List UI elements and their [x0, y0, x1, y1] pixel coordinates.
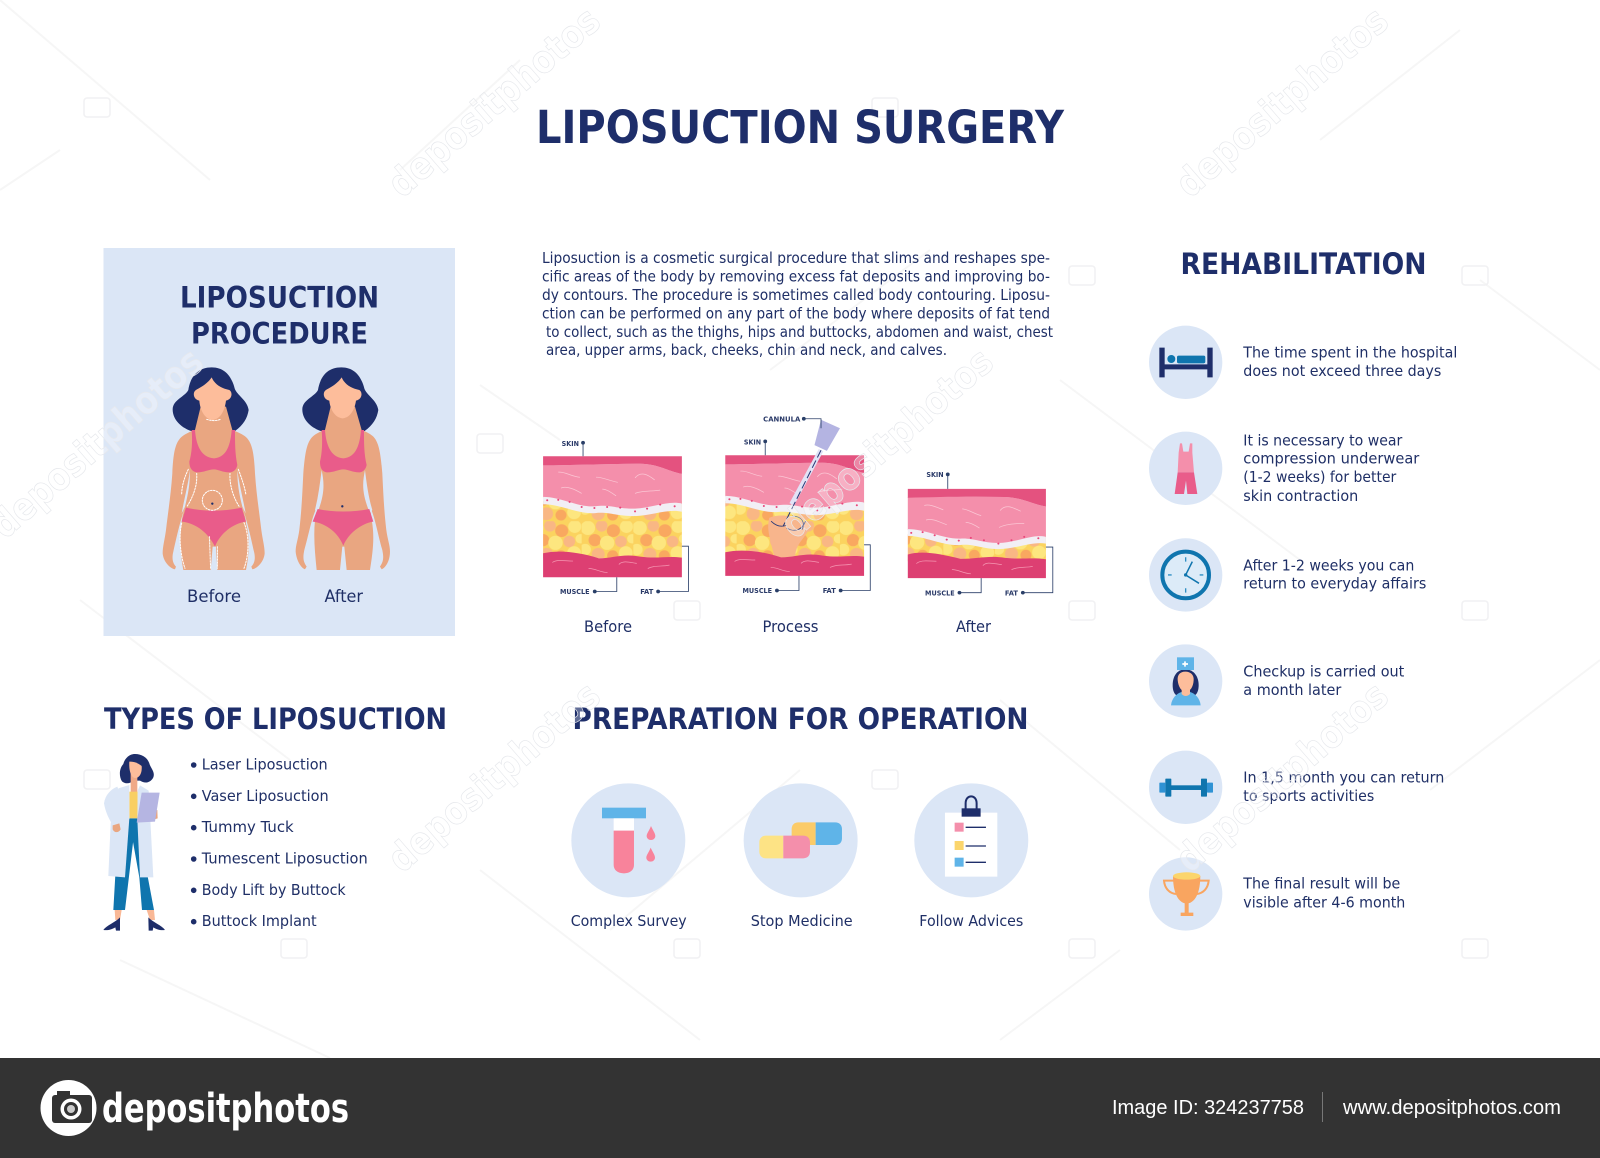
icon: pills: [744, 783, 858, 897]
rehab text: underwear: skin contraction: [1243, 487, 1358, 505]
caption: process stage: Process: [762, 617, 818, 636]
rehab text: final result: The final result will be: [1242, 875, 1400, 893]
rehab text: underwear: [1243, 431, 1420, 505]
panel: preparation for operation: [571, 702, 1028, 930]
skin diagram: after: FAT: [1005, 588, 1019, 597]
watermark text overlay: depositphotos: [772, 339, 1002, 547]
caption: follow advices: Follow Advices: [919, 912, 1023, 930]
rehab text: hospital: does not exceed three days: [1243, 362, 1441, 380]
image id: Image ID: 324237758: [1112, 1097, 1304, 1119]
website url: www.depositphotos.com: [1342, 1097, 1561, 1119]
intro paragraph: Liposuction is a cosmetic surgical procedure that slims and reshapes spe-: [542, 249, 1050, 267]
intro paragraph: ction can be performed on any part of the body where deposits of fat tend: [542, 304, 1050, 322]
skin diagram: process: [725, 415, 870, 595]
intro paragraph: to collect, such as the thighs, hips and buttocks, abdomen and waist, chest: [546, 323, 1053, 341]
rehab text: hospital: The time spent in the hospital: [1242, 344, 1457, 362]
list: liposuction types: Laser Liposuction: [202, 756, 328, 774]
caption: before stage: Before: [584, 617, 632, 636]
icon: dumbbell: [1149, 751, 1222, 824]
rehab text: checkup: Checkup is carried out: [1243, 662, 1404, 680]
watermark text overlay: depositphotos: [1167, 673, 1397, 881]
rehab text: underwear: (1-2 weeks) for better: [1243, 468, 1397, 486]
icon: clipboard: [914, 783, 1028, 897]
skin diagram: after: MUSCLE: [925, 588, 955, 597]
skin diagram: process: FAT: [823, 586, 837, 595]
list: liposuction types: [191, 756, 368, 930]
intro paragraph: area, upper arms, back, cheeks, chin and neck, and calves.: [546, 341, 947, 359]
panel heading: PROCEDURE: [191, 316, 368, 350]
icon: test tube: [571, 783, 685, 897]
rehab text: final result: visible after 4-6 month: [1243, 893, 1405, 911]
list: liposuction types: Tummy Tuck: [201, 818, 294, 836]
title: LIPOSUCTION SURGERY: [536, 101, 1065, 154]
list: liposuction types: Body Lift by Buttock: [202, 881, 346, 899]
rehab text: everyday affairs: [1243, 556, 1426, 593]
skin diagram: before: FAT: [640, 587, 654, 596]
icon: cannula: [771, 420, 840, 530]
icon: compression underwear: [1149, 432, 1222, 505]
caption: before: Before: [187, 587, 241, 606]
footer bar: [0, 1058, 1600, 1158]
rehab text: checkup: a month later: [1243, 681, 1342, 699]
logo wordmark: depositphotos: [102, 1086, 349, 1132]
list: liposuction types: Vaser Liposuction: [202, 787, 329, 805]
rehabilitation heading: REHABILITATION: [1180, 247, 1426, 281]
figure: body after: [296, 367, 390, 570]
skin diagram: after: SKIN: [926, 470, 944, 479]
list: liposuction types: Buttock Implant: [202, 912, 317, 930]
watermark text overlay: [0, 0, 1397, 881]
panel heading: LIPOSUCTION: [180, 280, 379, 314]
types heading: TYPES OF LIPOSUCTION: [104, 702, 447, 736]
skin diagram: after: [908, 470, 1053, 597]
rehab text: sports: [1243, 769, 1444, 805]
preparation heading: PREPARATION FOR OPERATION: [572, 702, 1028, 736]
logo icon: [40, 1080, 96, 1136]
intro paragraph: dy contours. The procedure is sometimes called body contouring. Liposu-: [542, 286, 1050, 304]
rehab text: underwear: compression underwear: [1243, 450, 1420, 468]
watermark text overlay: depositphotos: [379, 673, 609, 881]
list: liposuction types: Tumescent Liposuction: [201, 850, 368, 868]
rehab text: everyday affairs: After 1-2 weeks you can: [1243, 556, 1414, 574]
rehab text: sports: to sports activities: [1243, 787, 1374, 805]
skin diagram: before: MUSCLE: [560, 587, 590, 596]
panel heading: [180, 280, 379, 350]
rehab text: underwear: It is necessary to wear: [1243, 431, 1403, 449]
rehab text: sports: In 1,5 month you can return: [1243, 769, 1444, 787]
skin diagram: process: SKIN: [744, 438, 761, 446]
figure: body before: [163, 367, 265, 570]
panel: liposuction procedure: [104, 248, 455, 636]
skin diagram: before: SKIN: [562, 439, 579, 448]
panel: types of liposuction: [103, 702, 447, 931]
skin diagram: process: CANNULA: [763, 415, 801, 423]
icon: bed: [1149, 326, 1222, 399]
icon: nurse: [1149, 644, 1222, 718]
caption: stop medicine: Stop Medicine: [751, 912, 853, 930]
figure: doctor: [103, 754, 165, 931]
intro paragraph: cific areas of the body by removing excess fat deposits and improving bo-: [542, 268, 1050, 286]
rehab text: everyday affairs: return to everyday affairs: [1243, 575, 1426, 593]
skin diagram: before: [543, 439, 688, 596]
caption: after: After: [324, 587, 363, 606]
panel: rehabilitation: [1149, 247, 1457, 931]
caption: after stage: After: [956, 617, 991, 636]
rehab text: checkup: [1243, 662, 1404, 699]
skin diagram: process: MUSCLE: [742, 586, 772, 595]
icon: clock: [1149, 538, 1222, 612]
rehab text: hospital: [1242, 344, 1457, 380]
icon: trophy: [1149, 857, 1222, 931]
intro paragraph: [542, 249, 1053, 359]
rehab text: final result: [1242, 875, 1405, 911]
caption: complex survey: Complex Survey: [571, 912, 687, 930]
